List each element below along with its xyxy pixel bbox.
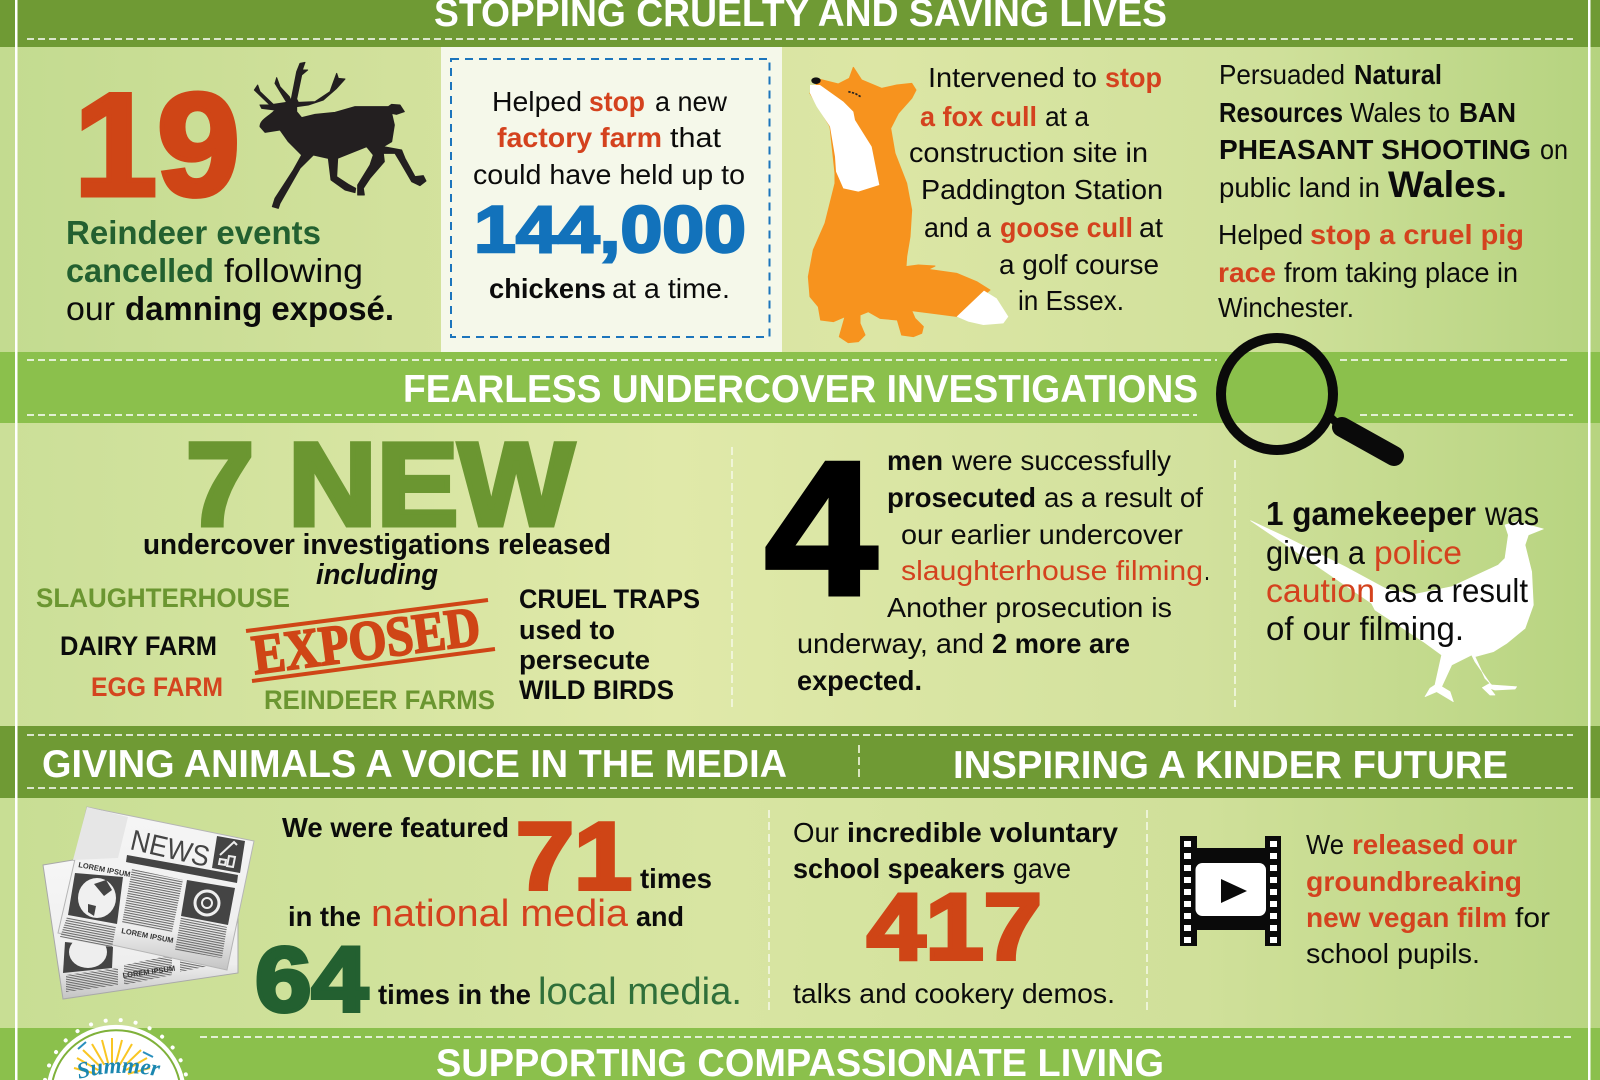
header band: fearless undercover investigations — [0, 352, 1600, 423]
icon: newspapers: LOREM IPSUM — [122, 964, 176, 980]
text: school speakers: gave — [1013, 853, 1071, 884]
stat: 7 new: 7 NEW — [186, 419, 575, 551]
panel: factory farm callout: Helped — [492, 86, 582, 117]
text: national media: We were featured — [282, 812, 509, 843]
text: gamekeeper police caution: was — [1484, 495, 1539, 532]
text: reindeer events cancelled: following — [224, 252, 363, 289]
text: men prosecuted — [797, 445, 1210, 696]
text: undercover investigations released: including — [316, 559, 438, 591]
text: cruel pig race: stop a cruel pig — [1310, 219, 1524, 250]
text: school speakers: incredible voluntary — [847, 817, 1118, 848]
header band: media and kinder future: GIVING ANIMALS A VOICE IN THE MEDIA — [42, 743, 787, 786]
text: school speakers: talks and cookery demos. — [793, 978, 1115, 1009]
panel: factory farm callout: stop — [589, 86, 645, 117]
text: cruel pig race — [1218, 219, 1524, 323]
text: fox cull and goose cull — [909, 62, 1163, 316]
text: pheasant shooting ban: public land in — [1219, 172, 1380, 203]
text: men prosecuted: expected. — [797, 665, 922, 696]
text: gamekeeper police caution: of our filming. — [1266, 610, 1464, 647]
icon: pheasant silhouette — [1251, 521, 1543, 702]
text: fox cull and goose cull: stop — [1105, 62, 1162, 93]
text: school speakers: Our — [793, 817, 839, 848]
text: gamekeeper police caution: given a — [1266, 534, 1366, 571]
panel: factory farm callout: factory farm — [497, 122, 662, 153]
text: pheasant shooting ban: Persuaded — [1219, 59, 1345, 90]
panel: factory farm callout: at a time. — [612, 273, 730, 304]
text: pheasant shooting ban: Natural — [1354, 59, 1442, 90]
text: undercover investigations released — [143, 529, 611, 591]
text: men prosecuted: 2 more are — [992, 628, 1130, 659]
icon: newspapers: NEWS — [127, 825, 213, 874]
icon: newspapers — [43, 807, 254, 999]
text: pheasant shooting ban — [1219, 59, 1568, 205]
text: pheasant shooting ban: on — [1540, 134, 1568, 165]
text: men prosecuted: prosecuted — [887, 482, 1036, 513]
text: pheasant shooting ban: PHEASANT SHOOTING — [1219, 134, 1531, 165]
text: fox cull and goose cull: Paddington Station — [921, 174, 1163, 205]
icon: film strip with play button — [1180, 836, 1281, 946]
panel: factory farm callout: could have held up to — [473, 159, 745, 190]
text: vegan film: We — [1306, 829, 1344, 860]
text: cruel pig race: from taking place in — [1284, 257, 1518, 288]
text: local media: 64 — [255, 929, 368, 1031]
text: local media: local media. — [538, 971, 742, 1013]
text: fox cull and goose cull: in Essex. — [1018, 285, 1124, 316]
list: investigation types: WILD BIRDS — [519, 675, 674, 705]
panel: factory farm callout: chickens — [489, 273, 606, 304]
text: fox cull and goose cull: a golf course — [999, 249, 1159, 280]
panel: factory farm callout — [441, 47, 782, 352]
icon: fox — [808, 67, 1008, 343]
stamp: exposed: EXPOSED — [249, 596, 484, 687]
text: vegan film: new vegan film — [1306, 902, 1507, 933]
text: national media: national media — [371, 893, 629, 935]
text: fox cull and goose cull: at a — [1045, 101, 1089, 132]
text: reindeer events cancelled — [66, 214, 394, 327]
text: vegan film — [1306, 829, 1550, 969]
header band: media and kinder future: INSPIRING A KINDER FUTURE — [953, 744, 1508, 787]
text: pheasant shooting ban: Wales to — [1350, 97, 1450, 128]
panel: factory farm callout: that — [670, 122, 721, 153]
header band: stopping cruelty — [0, 0, 1600, 47]
text: reindeer events cancelled: cancelled — [66, 252, 214, 289]
panel: factory farm callout: 144,000 — [474, 192, 746, 266]
text: men prosecuted: . — [1204, 555, 1210, 586]
list: investigation types: used to — [519, 615, 615, 645]
list: investigation types — [36, 583, 700, 715]
icon: newspapers: LOREM IPSUM — [121, 926, 174, 945]
icon: magnifying glass — [1221, 338, 1394, 456]
text: pheasant shooting ban: Wales. — [1388, 164, 1507, 205]
stat: 4: 4 — [765, 423, 877, 635]
text: gamekeeper police caution: police — [1374, 534, 1462, 571]
text: pheasant shooting ban: BAN — [1459, 97, 1516, 128]
text: men prosecuted: were successfully — [951, 445, 1171, 476]
text: school speakers — [793, 817, 1118, 1009]
panel: factory farm callout: a new — [655, 86, 728, 117]
text: national media — [282, 803, 712, 935]
list: investigation types: EGG FARM — [91, 672, 223, 702]
text: men prosecuted: underway, and — [797, 628, 984, 659]
panel: undercover investigations background — [0, 423, 1600, 726]
text: gamekeeper police caution: caution — [1266, 572, 1375, 609]
icon: newspapers: LOREM IPSUM — [78, 860, 131, 879]
text: fox cull and goose cull: at — [1139, 212, 1163, 243]
header band: supporting compassionate living — [0, 1028, 1600, 1080]
text: local media: times in the — [378, 979, 531, 1010]
text: reindeer events cancelled: Reindeer events — [66, 214, 321, 251]
text: gamekeeper police caution: as a result — [1384, 572, 1528, 609]
text: reindeer events cancelled: damning exposé. — [125, 290, 394, 327]
text: vegan film: for — [1515, 902, 1550, 933]
text: vegan film: released our — [1352, 829, 1517, 860]
text: fox cull and goose cull: construction site in — [909, 137, 1148, 168]
text: vegan film: groundbreaking — [1306, 866, 1522, 897]
list: investigation types: CRUEL TRAPS — [519, 584, 700, 614]
icon: reindeer silhouette — [254, 62, 426, 208]
list: investigation types: SLAUGHTERHOUSE — [36, 583, 290, 613]
list: investigation types: DAIRY FARM — [60, 631, 217, 661]
text: men prosecuted: as a result of — [1044, 482, 1203, 513]
text: cruel pig race: Winchester. — [1218, 292, 1354, 323]
text: fox cull and goose cull: and a — [924, 212, 991, 243]
text: national media: and — [636, 901, 684, 932]
text: national media: in the — [288, 901, 361, 932]
panel: media and future background — [0, 798, 1600, 1028]
text: fox cull and goose cull: Intervened to — [928, 62, 1097, 93]
text: national media: 71 — [516, 803, 632, 910]
badge: summer — [43, 1018, 188, 1080]
text: men prosecuted: slaughterhouse filming — [901, 555, 1203, 586]
text: gamekeeper police caution: 1 gamekeeper — [1266, 495, 1476, 532]
list: investigation types: REINDEER FARMS — [264, 685, 495, 715]
text: cruel pig race: race — [1218, 257, 1276, 288]
text: local media — [255, 929, 742, 1031]
text: fox cull and goose cull: a fox cull — [920, 101, 1037, 132]
text: men prosecuted: Another prosecution is — [887, 592, 1172, 623]
text: reindeer events cancelled: our — [66, 290, 115, 327]
text: fox cull and goose cull: goose cull — [1000, 212, 1133, 243]
text: gamekeeper police caution — [1266, 495, 1539, 647]
text: men prosecuted: our earlier undercover — [901, 519, 1183, 550]
header band: media and kinder future — [0, 726, 1600, 798]
text: school speakers: school speakers — [793, 853, 1005, 884]
text: national media: times — [640, 863, 712, 894]
stat: 19: 19 — [74, 63, 240, 226]
list: investigation types: persecute — [519, 645, 650, 675]
text: cruel pig race: Helped — [1218, 219, 1303, 250]
text: pheasant shooting ban: Resources — [1219, 97, 1343, 128]
text: men prosecuted: men — [887, 445, 943, 476]
panel: stopping cruelty background — [0, 47, 1600, 352]
text: undercover investigations released: undercover investigations released — [143, 529, 611, 561]
text: vegan film: school pupils. — [1306, 938, 1480, 969]
text: school speakers: 417 — [867, 874, 1042, 979]
header band: fearless undercover investigations: FEARLESS UNDERCOVER INVESTIGATIONS — [403, 368, 1198, 411]
